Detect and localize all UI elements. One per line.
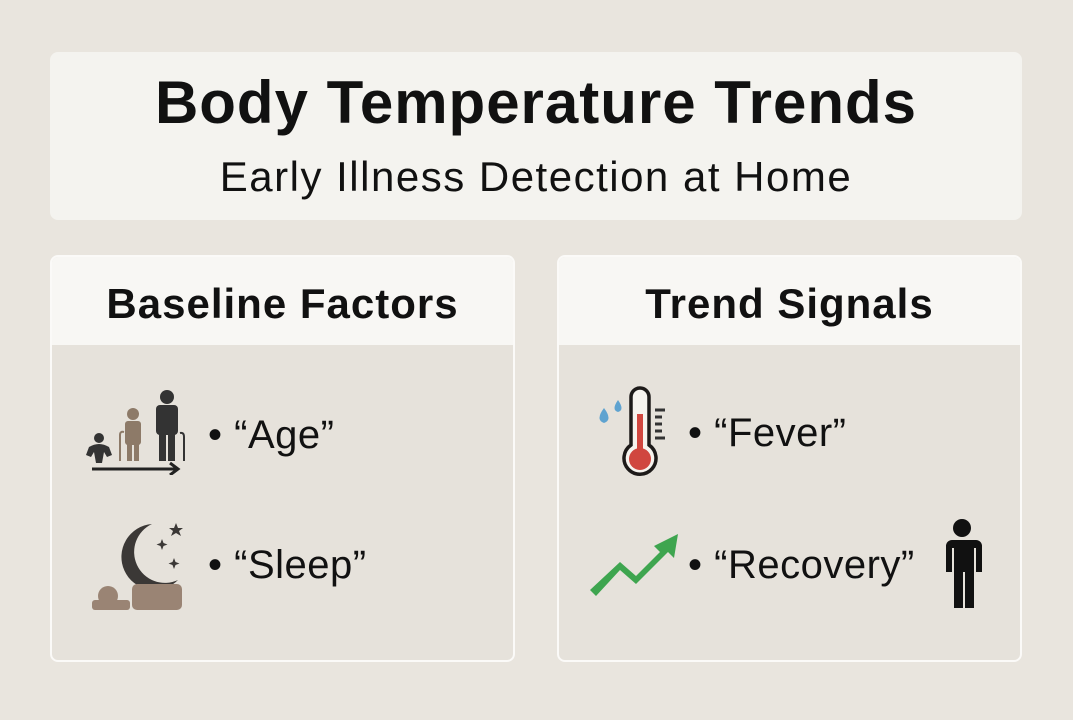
text: sleep: • “Sleep” — [208, 543, 367, 587]
icon: person — [946, 519, 982, 608]
heading: baseline factors: Baseline Factors — [106, 280, 459, 327]
heading: trend signals — [559, 257, 1020, 345]
icon: trend arrow — [590, 534, 678, 596]
subtitle: Early Illness Detection at Home — [220, 153, 852, 200]
text: fever: • “Fever” — [688, 411, 847, 455]
panel: baseline factors — [50, 255, 515, 662]
heading: baseline factors — [52, 257, 513, 345]
icon: sleep — [92, 523, 183, 610]
panel: trend signals — [557, 255, 1022, 662]
heading: trend signals: Trend Signals — [645, 280, 934, 327]
title: Body Temperature Trends — [155, 69, 917, 136]
icon: age — [86, 390, 185, 475]
title box — [50, 52, 1022, 220]
text: age: • “Age” — [208, 413, 334, 457]
text: recovery: • “Recovery” — [688, 543, 915, 587]
icon: thermometer — [600, 386, 665, 476]
